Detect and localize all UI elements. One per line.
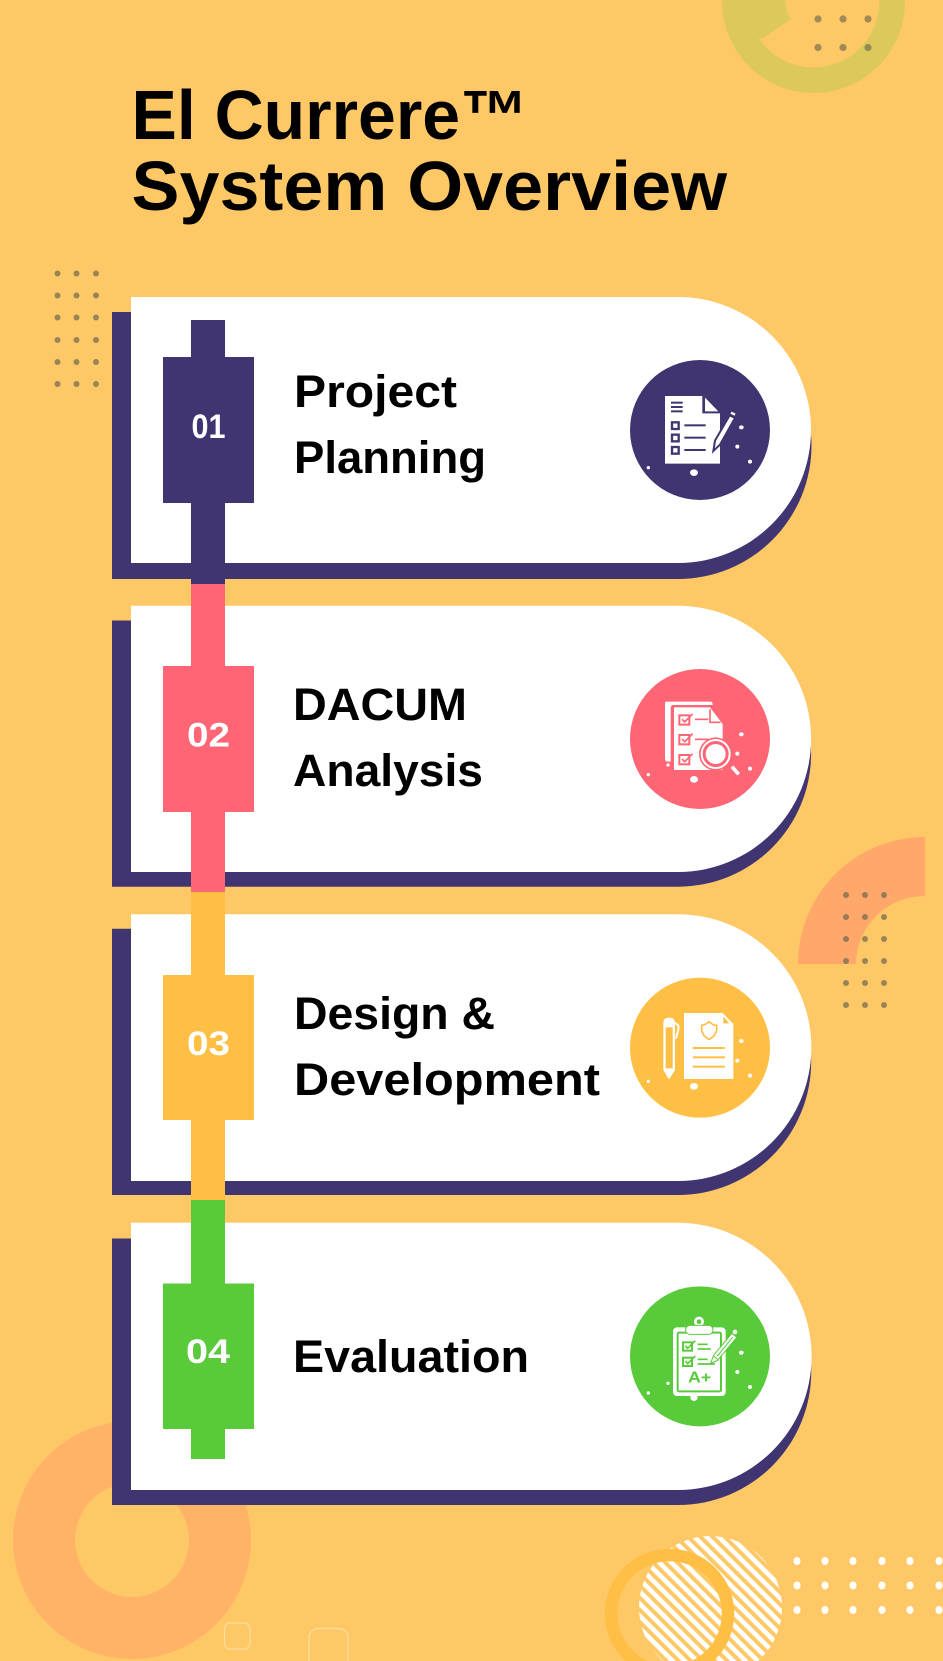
label: Project Planning: Project bbox=[294, 366, 457, 417]
icon: clipboard with A+ grade: A+ bbox=[688, 1370, 711, 1387]
label: Design & Development bbox=[294, 988, 600, 1105]
decoration: top right dots bbox=[814, 15, 872, 51]
label: DACUM Analysis: Analysis bbox=[293, 745, 483, 796]
icon: clipboard with A+ grade bbox=[630, 1286, 770, 1426]
label: Project Planning bbox=[294, 366, 486, 483]
step marker 04: 04 bbox=[186, 1333, 230, 1371]
decoration: left dots bbox=[54, 270, 99, 387]
panel: card 3 bbox=[112, 914, 811, 1195]
decoration: outlined rectangle at bottom bbox=[309, 1628, 348, 1661]
icon: document with shield and pen bbox=[630, 978, 770, 1118]
icon: checklist with magnifier bbox=[630, 669, 770, 809]
step marker 04 bbox=[163, 1200, 254, 1459]
icon: checklist document with pencil bbox=[630, 360, 770, 500]
step marker 01: 01 bbox=[192, 408, 226, 446]
panel: card 4 bbox=[112, 1223, 812, 1505]
label: Design & Development: Design & bbox=[294, 988, 495, 1039]
decoration: right quarter ring bbox=[798, 837, 925, 964]
label: Evaluation: Evaluation bbox=[293, 1331, 529, 1382]
step marker 02 bbox=[163, 584, 254, 892]
step marker 01 bbox=[163, 320, 254, 584]
label: Design & Development: Development bbox=[294, 1054, 600, 1105]
decoration: right dots bbox=[843, 892, 887, 1008]
decoration: small outlined rectangle bbox=[224, 1623, 250, 1649]
label: DACUM Analysis bbox=[293, 679, 483, 796]
step marker 02: 02 bbox=[187, 717, 230, 755]
panel: card 2 bbox=[112, 606, 811, 887]
step marker 03 bbox=[163, 892, 254, 1200]
decoration: bottom left ring bbox=[44, 1452, 220, 1628]
decoration: top right ring bbox=[735, 0, 892, 80]
label: DACUM Analysis: DACUM bbox=[293, 679, 467, 730]
title: System Overview bbox=[132, 147, 728, 225]
decoration: bottom right white dots bbox=[794, 1557, 942, 1614]
step marker 03: 03 bbox=[187, 1025, 230, 1063]
label: Project Planning: Planning bbox=[294, 432, 486, 483]
title bbox=[132, 76, 728, 225]
panel: card 1 bbox=[112, 297, 812, 579]
decoration: hatched circle bbox=[639, 1536, 782, 1661]
title: El Currere™ bbox=[132, 76, 528, 154]
decoration: bottom ring bbox=[611, 1555, 728, 1661]
